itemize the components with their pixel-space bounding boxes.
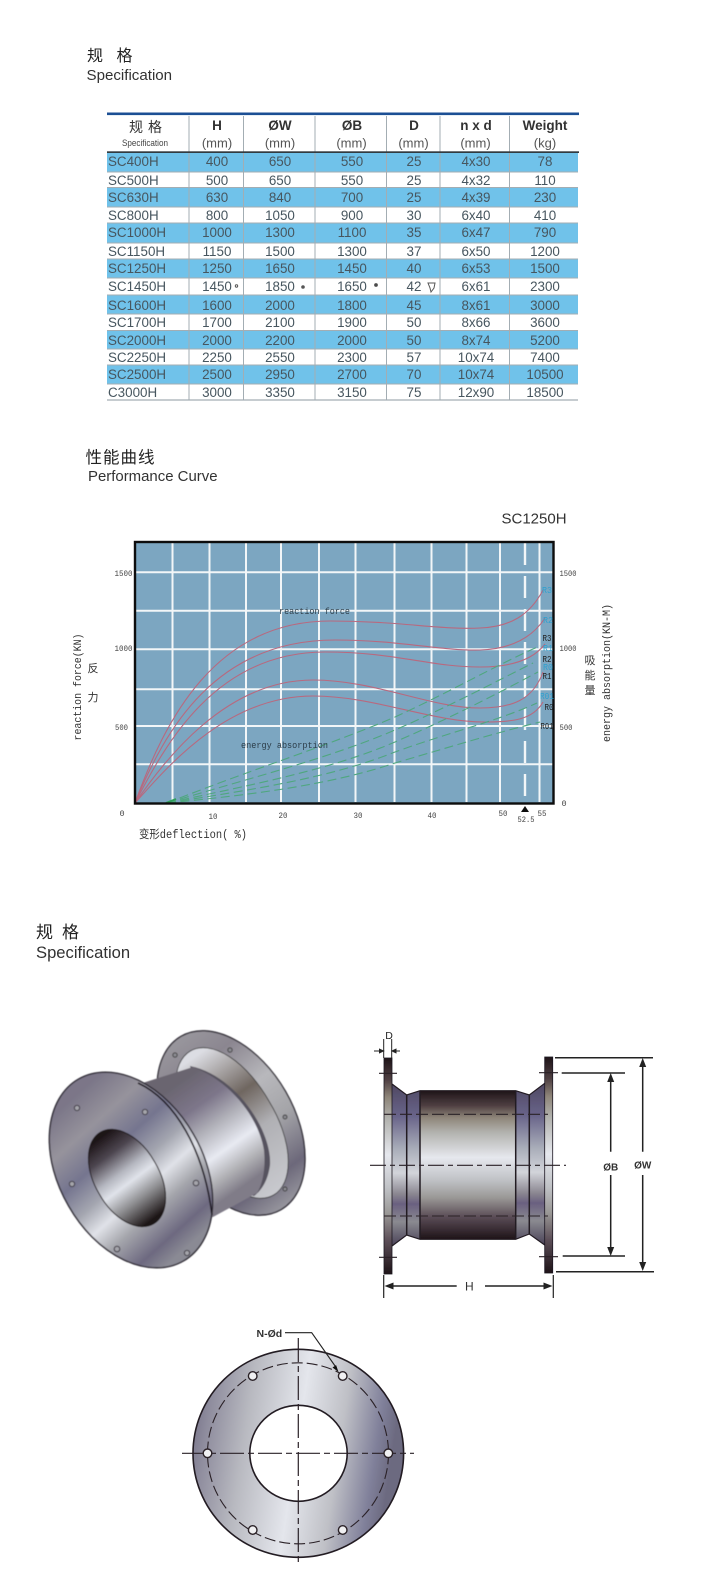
table header: 格: [148, 119, 162, 135]
table body: 650: [269, 173, 291, 188]
x axis labels: 40: [428, 811, 436, 821]
curve series labels: R01: [540, 722, 554, 732]
table body: 3000: [530, 298, 560, 313]
table body: SC1150H: [108, 244, 165, 259]
y axis title: energy absorption: [584, 604, 614, 742]
table body: 25: [407, 173, 421, 188]
table header: (kg): [534, 136, 556, 150]
table body: 790: [534, 225, 556, 240]
table body: SC500H: [108, 173, 159, 188]
x axis labels: 55: [538, 809, 546, 819]
y axis title: energy absorption: energy absorption(KN-M): [602, 604, 614, 742]
table header: Weight: [523, 118, 568, 133]
table body: 4x32: [461, 173, 491, 188]
curve series labels: R0: [544, 703, 554, 713]
table body: 78: [538, 154, 552, 169]
heading: specification section 3: Specification: [36, 943, 130, 962]
table header: ØW: [268, 118, 292, 133]
heading: performance curve: 性能曲线: [86, 448, 156, 467]
table body: 900: [341, 208, 363, 223]
chart plot background: [136, 542, 554, 803]
curve series labels: R2: [543, 616, 553, 626]
left axis labels: [114, 569, 132, 819]
table rules: [107, 116, 578, 400]
table body: 2000: [202, 333, 232, 348]
curve series labels: R1: [542, 672, 552, 682]
table body: C3000H: [108, 385, 157, 400]
table row bands: [107, 153, 578, 384]
energy absorption curves: [166, 646, 540, 803]
table body: 1500: [530, 261, 560, 276]
table body: 1150: [203, 244, 231, 259]
x axis labels: 52.5: [518, 815, 534, 825]
table body: SC1450H: [108, 279, 166, 294]
hidden lines: [370, 1073, 566, 1257]
table body: 8x74: [461, 333, 491, 348]
table body: 2300: [337, 350, 367, 365]
front flange: [49, 1072, 213, 1268]
x axis labels: 30: [354, 811, 362, 821]
table body: 1300: [265, 225, 295, 240]
table header: (mm): [202, 136, 232, 150]
table body: 2200: [265, 333, 295, 348]
table body: 2300: [530, 279, 560, 294]
left axis labels: 500: [115, 723, 128, 733]
table body: 1700: [202, 315, 232, 330]
table body: 6x61: [461, 279, 491, 294]
heading: specification section 1: 格: [116, 47, 133, 65]
table body: 2700: [337, 367, 367, 382]
rear inner ring: [176, 1048, 288, 1198]
table body: 57: [407, 350, 421, 365]
table header: (mm): [265, 136, 295, 150]
table body: 1100: [338, 225, 366, 240]
table header: D: [409, 118, 419, 133]
y axis title: reaction force: 反: [88, 660, 98, 676]
heading: specification section 3: 格: [62, 923, 79, 942]
curve series labels: R3: [542, 586, 552, 596]
callout: N-Ød: [256, 1328, 338, 1372]
table header: ØB: [342, 118, 362, 133]
table body: 50: [407, 333, 421, 348]
center lines: [182, 1338, 414, 1565]
right axis labels: 1500: [560, 569, 576, 579]
table body: SC2500H: [108, 367, 166, 382]
heading: performance curve: Performance Curve: [88, 468, 218, 485]
body hull: [130, 1067, 265, 1230]
curve series labels: R3: [542, 634, 552, 644]
flange disc with bore: [193, 1349, 404, 1557]
table body: 4x39: [461, 190, 491, 205]
table body: 6x47: [461, 225, 491, 240]
heading: specification section 1: Specification: [86, 67, 172, 84]
table body: SC2250H: [108, 350, 166, 365]
table body: 110: [534, 173, 556, 188]
table body: 25: [407, 190, 421, 205]
table body: SC800H: [108, 208, 159, 223]
table body: 840: [269, 190, 291, 205]
table body: 50: [407, 315, 421, 330]
table body: 800: [206, 208, 228, 223]
handwritten marks: [235, 283, 435, 292]
table body: 4x30: [461, 154, 491, 169]
dimension: H: [384, 1275, 553, 1298]
table body: 6x40: [461, 208, 491, 223]
heading: specification section 3: [36, 923, 130, 962]
heading: specification section 1: 规: [87, 48, 103, 65]
table body: 1650: [265, 261, 295, 276]
table body: 1300: [337, 244, 367, 259]
table body: [108, 154, 564, 400]
table body: 75: [407, 385, 421, 400]
right axis labels: [560, 569, 576, 809]
front view drawing: [182, 1328, 414, 1565]
curve series labels: R1: [543, 644, 553, 654]
table body: 410: [534, 208, 556, 223]
curve series labels: R2: [542, 655, 552, 665]
table body: 1450: [202, 279, 232, 294]
table header: (mm): [398, 136, 429, 150]
table body: 1450: [337, 261, 367, 276]
table body: SC400H: [108, 154, 159, 169]
table body: 3350: [265, 385, 295, 400]
table body: 550: [341, 154, 363, 169]
dimension: D: D: [385, 1030, 393, 1042]
table body: 1600: [202, 298, 232, 313]
table header: H: [212, 118, 222, 133]
x axis title: 变形deflection( %): [139, 827, 247, 842]
table header: 规: [129, 119, 143, 135]
table body: 1500: [265, 244, 295, 259]
table body: 6x53: [461, 261, 491, 276]
table body: 2000: [265, 298, 295, 313]
rear flange: [157, 1031, 305, 1215]
table body: 37: [407, 244, 421, 259]
side view drawing: [370, 1030, 654, 1298]
heading: performance curve: [86, 448, 218, 485]
table body: 1850: [265, 279, 295, 294]
table body: SC1000H: [108, 225, 166, 240]
table body: 5200: [530, 333, 560, 348]
table body: 700: [341, 190, 363, 205]
specification table: [107, 112, 579, 400]
dimension: H: H: [465, 1280, 474, 1294]
table body: 45: [407, 298, 421, 313]
callout: N-Ød: N-Ød: [256, 1328, 282, 1340]
right axis labels: 1000: [560, 644, 576, 654]
table body: 70: [407, 367, 421, 382]
table body: 10x74: [458, 350, 495, 365]
right taper: [516, 1083, 545, 1245]
table body: 2500: [202, 367, 232, 382]
left axis labels: 0: [119, 809, 125, 819]
table body: 2000: [337, 333, 367, 348]
dimension: ØW: [555, 1058, 654, 1272]
table body: 3150: [337, 385, 367, 400]
table body: SC1700H: [108, 315, 166, 330]
curve captions: [241, 606, 350, 751]
table body: SC2000H: [108, 333, 166, 348]
chart grid: [136, 543, 553, 802]
table body: 7400: [530, 350, 560, 365]
table body: 35: [407, 225, 421, 240]
table body: 550: [341, 173, 363, 188]
marker: 52.5 deflection: [521, 806, 529, 812]
x axis labels: 50: [498, 809, 508, 819]
dimension: ØB: [562, 1073, 625, 1256]
left axis labels: 1500: [114, 569, 132, 579]
curve series labels: [540, 586, 554, 732]
chart label: model: SC1250H: [502, 510, 567, 528]
table body: 2100: [265, 315, 295, 330]
table body: SC1600H: [108, 298, 166, 313]
table header: (mm): [336, 136, 367, 150]
table body: 1900: [337, 315, 367, 330]
right flange: [545, 1057, 553, 1273]
table body: 6x50: [461, 244, 491, 259]
table body: 1200: [530, 244, 560, 259]
front flange bolt holes: [69, 1105, 199, 1256]
table body: 10500: [526, 367, 564, 382]
body end: [190, 1066, 270, 1196]
table body: 42: [407, 279, 421, 294]
table body: 2250: [202, 350, 232, 365]
table body: 30: [407, 208, 421, 223]
y axis title: reaction force: [73, 634, 98, 740]
chart frame: [135, 542, 554, 804]
table body: 2550: [265, 350, 295, 365]
curve series labels: R0: [543, 663, 553, 673]
table body: 2950: [265, 367, 295, 382]
table body: 18500: [526, 385, 564, 400]
table header: [122, 118, 568, 150]
table header: n x d: [460, 118, 492, 133]
y axis title: energy absorption: 能: [584, 667, 596, 683]
table body: 3000: [202, 385, 232, 400]
x axis labels: 10: [208, 812, 218, 822]
x axis labels: [208, 809, 546, 825]
curve series labels: R01: [540, 692, 554, 702]
x axis labels: 20: [278, 811, 288, 821]
table body: 8x61: [461, 298, 491, 313]
table body: SC1250H: [108, 261, 166, 276]
y axis title: energy absorption: 吸: [584, 652, 596, 668]
left taper: [392, 1084, 420, 1246]
right axis labels: 500: [560, 723, 572, 733]
y axis title: energy absorption: 量: [584, 682, 596, 698]
y axis title: reaction force: reaction force(KN): [73, 634, 85, 740]
table header: Specification: [122, 138, 168, 149]
table body: 1800: [337, 298, 367, 313]
bolt circle: [208, 1363, 388, 1544]
table body: 3600: [530, 315, 560, 330]
table body: 1250: [202, 261, 232, 276]
table body: 650: [269, 154, 291, 169]
bore: [88, 1129, 166, 1227]
left axis labels: 1000: [114, 644, 132, 654]
right axis labels: 0: [561, 799, 567, 809]
3D view of fender: [49, 1031, 305, 1268]
table body: 1050: [265, 208, 295, 223]
table body: 10x74: [458, 367, 495, 382]
flange rim edge: [138, 1083, 212, 1215]
table body: 1650: [337, 279, 367, 294]
center body: [420, 1091, 516, 1239]
rear flange bolt holes: [173, 1048, 287, 1191]
performance curve chart: [73, 542, 614, 842]
bolt holes: [203, 1372, 393, 1534]
heading: specification section 1: [86, 47, 172, 84]
table body: 12x90: [458, 385, 494, 400]
dimension: ØW: ØW: [634, 1160, 652, 1172]
table body: SC630H: [108, 190, 159, 205]
outlines: [392, 1083, 545, 1246]
table body: 230: [534, 190, 556, 205]
table body: 40: [407, 261, 421, 276]
curve captions: reaction force: [279, 606, 350, 617]
table body: 1000: [202, 225, 232, 240]
table body: 25: [407, 154, 421, 169]
table body: 8x66: [461, 315, 491, 330]
left flange: [384, 1058, 392, 1274]
table body: 630: [206, 190, 228, 205]
table body: 400: [206, 154, 228, 169]
y axis title: reaction force: 力: [88, 689, 98, 705]
table body: 500: [206, 173, 228, 188]
curve captions: energy absorption: [241, 740, 328, 751]
dimension: ØB: ØB: [603, 1162, 618, 1174]
table header: (mm): [460, 136, 491, 150]
dimension: D: [374, 1030, 400, 1058]
heading: specification section 3: 规: [36, 923, 53, 942]
reaction force curves: [135, 590, 545, 803]
